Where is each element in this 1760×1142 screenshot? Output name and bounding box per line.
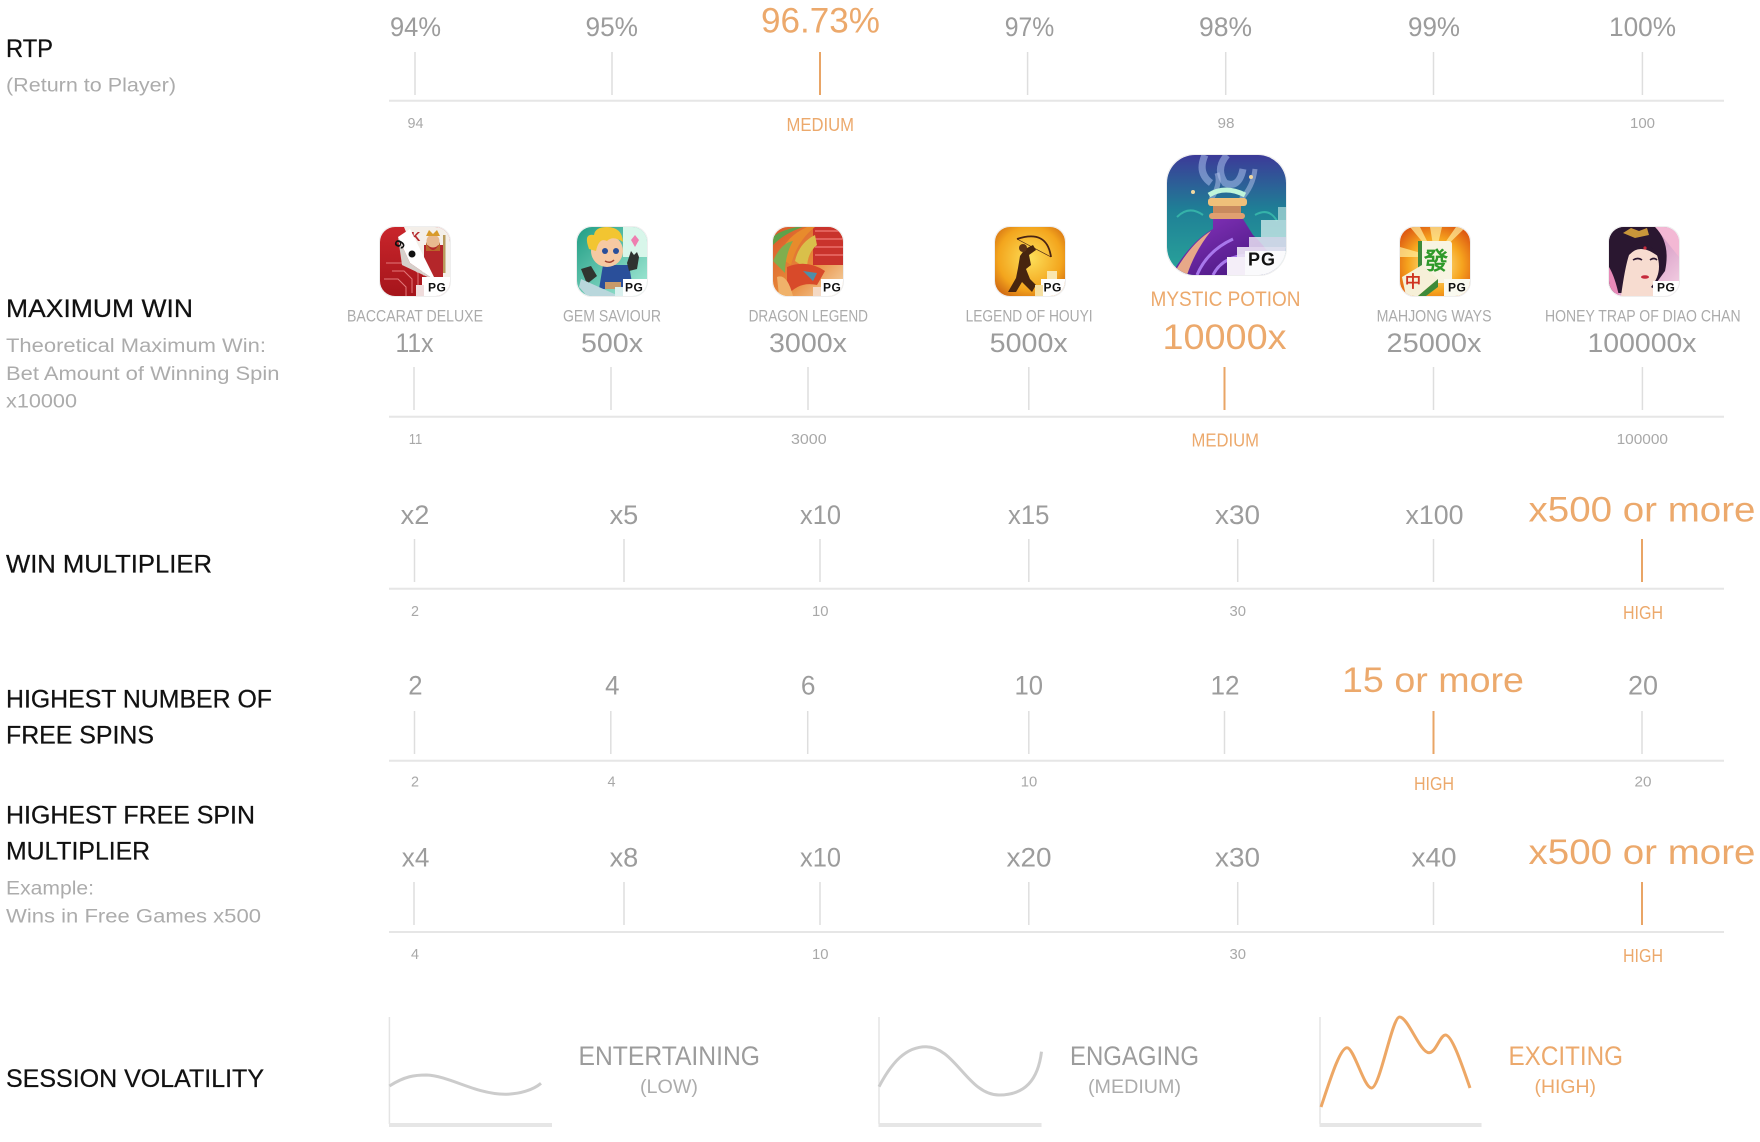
heading: highest number of free spins [6, 686, 272, 749]
icon: Legend of Houyi [994, 226, 1066, 296]
heading: highest free spin multiplier [6, 801, 261, 928]
marker: x20 [1006, 842, 1052, 925]
icon: Gem Saviour: PG [625, 280, 643, 294]
marker: x30: 30 [1230, 604, 1246, 620]
row: maximum win [6, 154, 1741, 451]
marker: 25000x: 25000x [1386, 328, 1482, 358]
label: Baccarat Deluxe: BACCARAT DELUXE [347, 308, 483, 326]
marker: x10 [800, 500, 841, 620]
marker: 12: 12 [1210, 670, 1240, 700]
marker: 25000x [1386, 328, 1482, 410]
marker: 15 or more highlighted [1342, 661, 1524, 794]
axis: free spin multiplier [389, 931, 1724, 933]
marker: 4: 4 [605, 670, 620, 700]
heading: RTP: RTP [6, 35, 53, 63]
marker: x30 [1215, 842, 1260, 963]
row: win multiplier [6, 490, 1756, 623]
row: highest free spin multiplier [6, 801, 1756, 966]
marker: 97% [1005, 12, 1054, 95]
heading: maximum win: Theoretical Maximum Win: [6, 336, 266, 357]
label: Legend of Houyi: LEGEND OF HOUYI [966, 308, 1093, 326]
marker: 4: 4 [608, 775, 616, 791]
marker: 96.73% highlighted: MEDIUM [786, 115, 854, 135]
label: entertaining low: ENTERTAINING [578, 1041, 760, 1071]
marker: 3000x: 3000x [769, 328, 847, 358]
marker: x10: x10 [800, 500, 841, 530]
marker: x2: 2 [411, 604, 419, 620]
marker: 98%: 98% [1199, 12, 1252, 42]
marker: 10000x highlighted [1162, 318, 1287, 451]
marker: 95%: 95% [586, 12, 638, 42]
axis: RTP [389, 100, 1724, 102]
marker: 12 [1210, 670, 1240, 754]
marker: x40 [1412, 842, 1456, 925]
row: RTP [6, 2, 1724, 135]
marker: x500 or more highlighted: x500 or more [1528, 833, 1756, 872]
marker: 15 or more highlighted: 15 or more [1342, 661, 1524, 700]
marker: x2 [401, 500, 429, 620]
marker: x100: x100 [1406, 500, 1464, 530]
row: highest number of free spins [6, 661, 1724, 794]
icon: Honey Trap of Diao Chan: PG [1657, 280, 1675, 294]
icon: Baccarat Deluxe: PG [428, 280, 446, 294]
heading: session volatility: SESSION VOLATILITY [6, 1065, 264, 1093]
marker: 15 or more highlighted: HIGH [1414, 774, 1454, 794]
icon: Baccarat Deluxe: K [411, 229, 421, 244]
marker: 100%: 100% [1609, 12, 1676, 42]
axis: free spins [389, 760, 1724, 762]
label: Dragon Legend: DRAGON LEGEND [749, 308, 868, 326]
marker: x10: 10 [812, 947, 828, 963]
marker: 6 [801, 670, 816, 754]
marker: 500x: 500x [581, 328, 643, 358]
marker: 3000x: 3000 [791, 432, 827, 448]
marker: 96.73% highlighted: 96.73% [761, 2, 880, 41]
marker: 11x [396, 328, 434, 448]
label: exciting high [1508, 1041, 1623, 1098]
icon: Mystic Potion [1166, 154, 1286, 276]
icon: Dragon Legend [772, 226, 844, 296]
heading: highest number of free spins: FREE SPINS [6, 721, 154, 749]
marker: 94%: 94% [390, 12, 441, 42]
marker: 20: 20 [1628, 670, 1658, 700]
marker: x2: x2 [401, 500, 429, 530]
heading: highest free spin multiplier: Example: [6, 879, 94, 900]
marker: 11x: 11 [409, 432, 422, 448]
marker: 10: 10 [1014, 670, 1043, 700]
marker: x15: x15 [1008, 500, 1049, 530]
marker: x10 [800, 842, 841, 963]
heading: highest free spin multiplier: HIGHEST FREE SPIN [6, 801, 255, 829]
heading: highest free spin multiplier: Wins in Free Games x500 [6, 907, 261, 928]
marker: x5: x5 [610, 500, 638, 530]
marker: 4 [605, 670, 620, 791]
marker: x500 or more highlighted: HIGH [1623, 946, 1663, 966]
marker: x30 [1215, 500, 1260, 620]
marker: 94%: 94 [408, 116, 424, 132]
icon: Mahjong Ways: 發 [1423, 248, 1448, 275]
marker: 20 [1628, 670, 1658, 791]
marker: x8 [610, 842, 638, 925]
marker: 10000x highlighted: MEDIUM [1192, 431, 1259, 451]
chart: high volatility curve [1320, 1017, 1482, 1125]
label: Mystic Potion: MYSTIC POTION [1150, 287, 1300, 311]
marker: 2: 2 [411, 775, 419, 791]
marker: 6: 6 [801, 670, 816, 700]
label: Gem Saviour: GEM SAVIOUR [563, 308, 661, 326]
marker: x10: 10 [812, 604, 828, 620]
heading: highest free spin multiplier: MULTIPLIER [6, 837, 150, 865]
marker: 100% [1609, 12, 1676, 132]
icon: Legend of Houyi: PG [1044, 280, 1062, 294]
marker: x8: x8 [610, 842, 638, 872]
marker: 2: 2 [408, 670, 422, 700]
marker: 98%: 98 [1218, 116, 1234, 132]
icon: Baccarat Deluxe [380, 226, 450, 296]
label: entertaining low: (LOW) [640, 1077, 698, 1098]
marker: 10: 10 [1021, 775, 1037, 791]
marker: x4 [402, 842, 429, 963]
marker: 98% [1199, 12, 1252, 132]
heading: maximum win [6, 295, 280, 413]
marker: x30: 30 [1230, 947, 1246, 963]
marker: 100000x [1588, 328, 1696, 448]
marker: 5000x [990, 328, 1068, 410]
marker: 10000x highlighted: 10000x [1162, 318, 1287, 357]
icon: Mahjong Ways [1400, 226, 1470, 296]
marker: 95% [586, 12, 638, 95]
marker: x100 [1406, 500, 1464, 582]
heading: RTP: (Return to Player) [6, 76, 176, 96]
heading: maximum win: MAXIMUM WIN [6, 295, 193, 323]
marker: 99%: 99% [1408, 12, 1460, 42]
marker: x10: x10 [800, 842, 841, 872]
heading: win multiplier: WIN MULTIPLIER [6, 551, 212, 579]
icon: Mystic Potion: PG [1248, 250, 1276, 270]
marker: 2 [408, 670, 422, 791]
marker: 96.73% highlighted [761, 2, 880, 135]
label: exciting high: (HIGH) [1534, 1077, 1596, 1098]
icon: Mahjong Ways: 中 [1405, 272, 1421, 291]
marker: 100000x: 100000x [1588, 328, 1696, 358]
icon: Gem Saviour [576, 226, 648, 296]
label: engaging medium [1070, 1041, 1199, 1098]
marker: 5000x: 5000x [990, 328, 1068, 358]
label: engaging medium: ENGAGING [1070, 1041, 1199, 1071]
heading: maximum win: Bet Amount of Winning Spin [6, 364, 280, 385]
marker: x500 or more highlighted: HIGH [1623, 603, 1663, 623]
marker: 500x [581, 328, 643, 410]
marker: 100000x: 100000 [1617, 432, 1668, 448]
marker: 99% [1408, 12, 1460, 95]
label: entertaining low [578, 1041, 760, 1098]
icon: Baccarat Deluxe: 9 [391, 237, 409, 252]
chart: low volatility curve [389, 1017, 552, 1125]
marker: x500 or more highlighted: x500 or more [1528, 490, 1756, 530]
marker: 94% [390, 12, 441, 132]
label: exciting high: EXCITING [1508, 1041, 1623, 1071]
marker: x30: x30 [1215, 842, 1260, 872]
marker: x15 [1008, 500, 1049, 582]
chart: medium volatility curve [878, 1017, 1042, 1125]
heading: highest number of free spins: HIGHEST NUMBER OF [6, 686, 272, 714]
marker: x5 [610, 500, 638, 582]
marker: x20: x20 [1006, 842, 1052, 872]
marker: x4: 4 [411, 947, 419, 963]
marker: 3000x [769, 328, 847, 448]
marker: x40: x40 [1412, 842, 1456, 872]
axis: maximum win [389, 416, 1724, 418]
label: engaging medium: (MEDIUM) [1088, 1077, 1181, 1098]
axis: win multiplier [389, 588, 1724, 590]
icon: Mahjong Ways: PG [1448, 280, 1466, 294]
marker: 10 [1014, 670, 1043, 791]
icon: Dragon Legend: PG [823, 280, 841, 294]
marker: x500 or more highlighted [1528, 490, 1756, 623]
label: Mahjong Ways: MAHJONG WAYS [1377, 308, 1492, 326]
marker: x30: x30 [1215, 500, 1260, 530]
marker: x4: x4 [402, 842, 429, 872]
heading: RTP [6, 35, 176, 96]
heading: maximum win: x10000 [6, 392, 77, 413]
row: session volatility [6, 1017, 1623, 1125]
marker: x500 or more highlighted [1528, 833, 1756, 966]
marker: 100%: 100 [1630, 116, 1655, 132]
icon: Honey Trap of Diao Chan [1608, 226, 1680, 296]
marker: 11x: 11x [396, 328, 434, 358]
marker: 20: 20 [1634, 775, 1652, 791]
marker: 97%: 97% [1005, 12, 1054, 42]
